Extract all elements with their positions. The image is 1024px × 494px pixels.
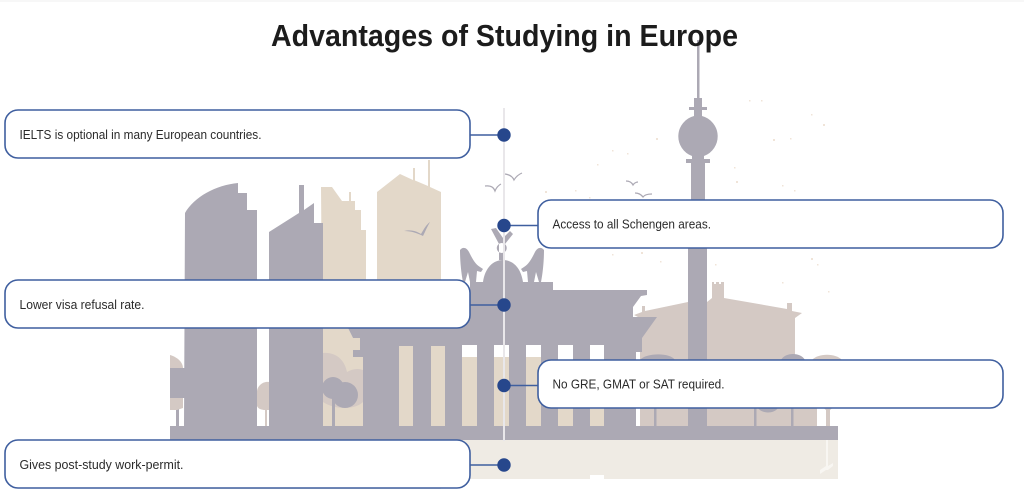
callout: post-study work permit <box>5 440 511 488</box>
beige tower right <box>377 160 441 300</box>
brown building <box>634 282 817 426</box>
illustration: Berlin skyline <box>170 40 842 489</box>
faint tree reflection <box>820 440 833 474</box>
callout: visa refusal: Lower visa refusal rate. <box>20 298 144 312</box>
beige speck dots <box>545 100 830 292</box>
skyscraper one <box>184 183 257 426</box>
brown trees <box>170 355 269 426</box>
skyscraper two <box>269 185 323 426</box>
vertical timeline line <box>503 108 505 441</box>
beige tower left <box>321 187 366 426</box>
callout: post-study work permit: Gives post-study work-permit. <box>20 458 184 472</box>
callout: Schengen access <box>497 200 1003 248</box>
brown tree cluster <box>323 353 363 408</box>
TV tower <box>678 40 718 426</box>
bird <box>404 222 430 236</box>
callout: IELTS optional <box>5 110 511 158</box>
callout: IELTS optional: IELTS is optional in many European countries. <box>20 128 262 142</box>
tree trunks on building <box>654 405 794 426</box>
ground band <box>170 440 838 489</box>
gray tree tops on building <box>640 354 805 412</box>
birds small <box>485 173 652 197</box>
Brandenburg gate <box>348 260 657 426</box>
ground bar <box>170 426 838 440</box>
brown trees right <box>812 355 842 426</box>
callout: Schengen access: Access to all Schengen areas. <box>552 218 711 232</box>
gray trees <box>170 368 186 426</box>
callout: no GRE GMAT SAT: No GRE, GMAT or SAT required. <box>552 378 724 392</box>
beige gate backdrop <box>399 346 604 426</box>
callout: no GRE GMAT SAT <box>497 360 1003 408</box>
callout: visa refusal <box>5 280 511 328</box>
title: Advantages of Studying in Europe <box>271 18 738 53</box>
gate quadriga horses and statue <box>460 228 544 282</box>
